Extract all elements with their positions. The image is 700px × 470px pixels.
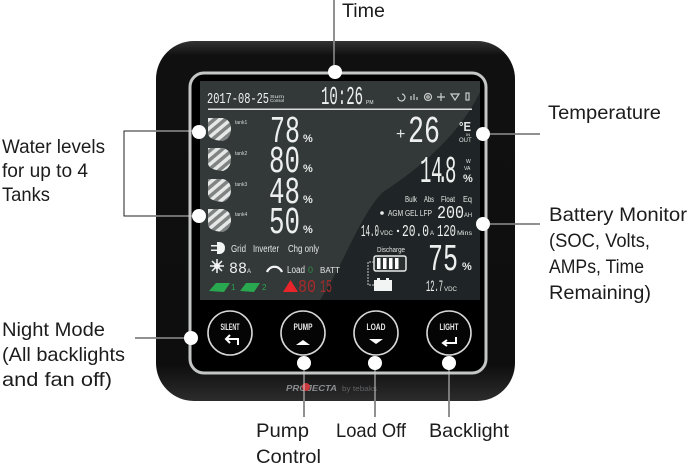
label: battery monitor: [549, 204, 688, 304]
battery monitor values: A: [430, 231, 434, 237]
battery monitor values: 20.0: [402, 223, 429, 242]
button: light: LIGHT: [440, 322, 459, 332]
label: battery monitor: (SOC, Volts,: [549, 230, 650, 252]
solar panels and alarm row: 2: [262, 283, 267, 292]
callout lines: [124, 0, 540, 417]
solar and load row: A: [247, 269, 251, 275]
battery discharge graphic: [368, 239, 472, 296]
button: load: [354, 311, 398, 355]
brand logo: PROJECTA: [286, 384, 337, 393]
battery discharge graphic: 12.7: [426, 278, 443, 296]
screen header: date and clock: 2017-08-25: [207, 91, 269, 108]
solar panels and alarm row: 1: [231, 283, 236, 292]
label: time: Time: [342, 0, 385, 22]
volts readout: [420, 152, 473, 195]
volts readout: %: [463, 173, 473, 185]
tank 3: %: [303, 194, 313, 206]
tank 2: tank2: [235, 151, 247, 157]
battery discharge graphic: 75: [428, 239, 458, 282]
source status row: Grid: [231, 244, 246, 255]
tank 4: tank4: [235, 212, 247, 218]
label: pump control: Control: [256, 446, 321, 468]
battery discharge graphic: VDC: [444, 287, 458, 293]
screen header: date and clock: [207, 82, 374, 112]
volts readout: 14.8: [420, 152, 456, 195]
temperature readout: OUT: [459, 138, 472, 144]
tank 1: %: [303, 133, 313, 145]
battery settings: Abs: [424, 195, 434, 204]
solar panels and alarm row: [209, 278, 332, 298]
label: water levels: Water levels: [2, 136, 105, 158]
label: battery monitor: Battery Monitor: [549, 204, 688, 226]
source status row: Inverter: [253, 244, 280, 255]
battery monitor values: [361, 223, 472, 242]
tank 1: [208, 111, 313, 154]
label: load off: Load Off: [336, 420, 407, 442]
button: silent: SILENT: [220, 322, 240, 332]
temperature readout: [396, 111, 472, 154]
screen header: date and clock: Sum: [270, 94, 284, 99]
brand logo: [286, 383, 378, 393]
button: load: LOAD: [366, 322, 386, 332]
tank 3: 48: [269, 172, 300, 215]
tank levels: [208, 111, 313, 245]
tank 4: [208, 202, 313, 245]
battery settings: Eq: [463, 195, 472, 204]
tank 4: %: [303, 224, 313, 236]
label: night mode: (All backlights: [2, 344, 125, 366]
brand logo: by tebaks: [342, 386, 378, 393]
battery monitor values: 14.0: [361, 223, 379, 242]
battery monitor values: 120: [437, 223, 456, 242]
solar and load row: Load: [287, 265, 305, 276]
volts readout: VA: [464, 166, 471, 172]
tank 2: 80: [269, 141, 300, 184]
button: pump: [281, 311, 325, 355]
label: night mode: and fan off): [2, 369, 112, 391]
solar panels and alarm row: 15: [320, 278, 332, 298]
label: pump control: [256, 420, 321, 468]
button: silent: [208, 311, 252, 355]
label: battery monitor: AMPs, Time: [549, 256, 644, 278]
label: water levels: for up to 4: [2, 160, 88, 182]
tank 4: 50: [269, 202, 300, 245]
screen header: date and clock: 10:26: [321, 82, 363, 112]
label: night mode: Night Mode: [2, 319, 105, 341]
tank 3: [208, 172, 313, 215]
label: pump control: Pump: [256, 420, 309, 442]
battery settings: AGM GEL LFP: [388, 209, 432, 218]
label: backlight: Backlight: [429, 420, 510, 442]
battery settings: 200: [437, 204, 464, 224]
label: temperature: Temperature: [548, 102, 661, 124]
tank 2: [208, 141, 313, 184]
battery settings: AH: [464, 213, 472, 219]
source status row: Chg only: [288, 244, 319, 255]
label: night mode: [2, 319, 125, 391]
solar and load row: 0: [308, 265, 313, 275]
device body: [156, 41, 515, 401]
battery discharge graphic: %: [462, 261, 472, 273]
button: pump: PUMP: [294, 322, 312, 332]
temperature readout: 26: [408, 111, 440, 154]
battery monitor values: Mins: [457, 231, 472, 237]
tank 1: 78: [270, 111, 300, 154]
label: water levels: Tanks: [2, 184, 50, 206]
temperature readout: °E: [459, 119, 471, 134]
screen header: date and clock: PM: [366, 100, 374, 106]
tank 2: %: [303, 163, 313, 175]
screen header: date and clock: Consol: [270, 98, 284, 103]
status icons: [398, 93, 469, 101]
battery settings: [380, 195, 472, 224]
battery settings: Float: [441, 195, 456, 204]
callout dots: [184, 65, 490, 370]
label: battery monitor: Remaining): [549, 282, 651, 304]
button: light: [427, 311, 471, 355]
tank 3: tank3: [235, 182, 247, 188]
battery discharge graphic: Discharge: [377, 247, 405, 254]
battery monitor values: VDC: [380, 231, 394, 237]
temperature readout: +: [396, 126, 405, 143]
battery settings: Bulk: [405, 195, 418, 204]
temperature readout: IN: [466, 132, 470, 137]
label: water levels: [2, 136, 105, 206]
solar and load row: [210, 259, 340, 278]
solar and load row: 88: [229, 260, 247, 278]
solar panels and alarm row: 80: [298, 278, 316, 298]
tank 1: tank1: [235, 120, 247, 126]
volts readout: W: [466, 159, 471, 165]
solar and load row: BATT: [320, 265, 340, 275]
source status row: [211, 242, 319, 255]
LCD screen: [200, 81, 480, 300]
